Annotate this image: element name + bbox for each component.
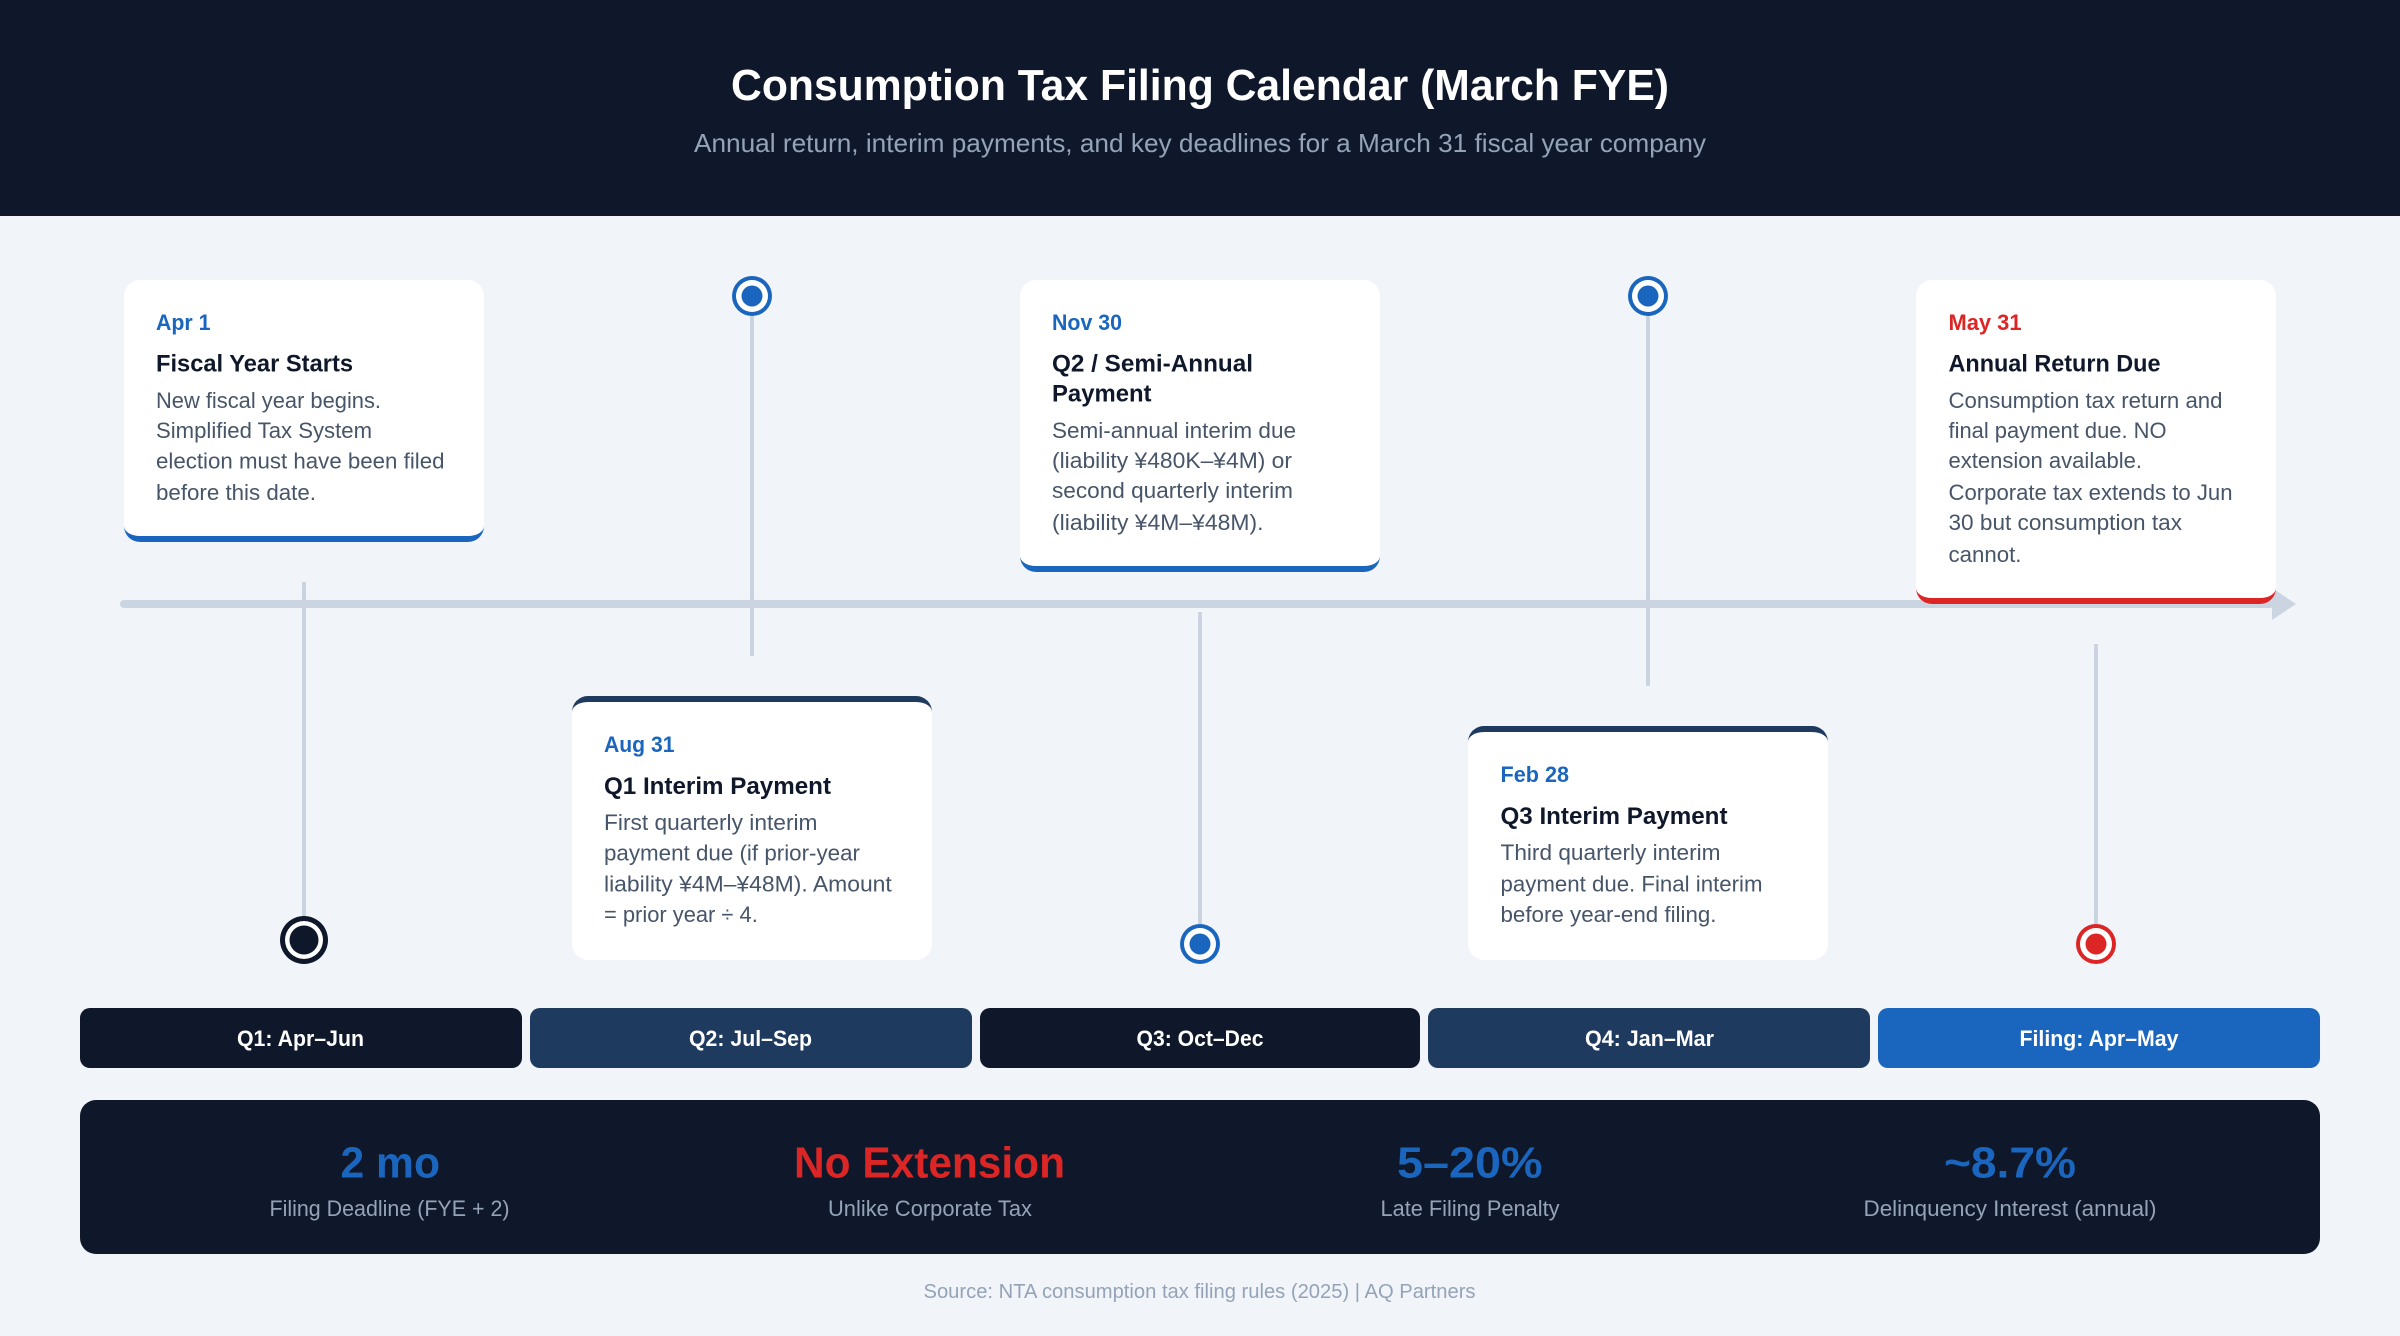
quarter bar: Q3 bbox=[980, 1008, 1420, 1068]
card body: Corporate tax extends to Jun bbox=[1948, 480, 2232, 505]
card body: Semi-annual interim due bbox=[1052, 418, 1296, 443]
quarter bar: Q4 bbox=[1428, 1008, 1870, 1068]
card heading: Annual Return Due bbox=[1948, 350, 2160, 378]
card body: (liability ¥4M–¥48M). bbox=[1052, 510, 1264, 535]
card heading: Fiscal Year Starts bbox=[156, 350, 353, 378]
quarter bar: Q1 bbox=[80, 1008, 522, 1068]
stat: filing deadline: Filing Deadline (FYE + 2) bbox=[270, 1196, 510, 1221]
panel: May 31 card bbox=[1916, 280, 2276, 604]
source note: Source: NTA consumption tax filing rules (2025) | AQ Partners bbox=[924, 1281, 1476, 1303]
quarter bar: Q3: Q3: Oct–Dec bbox=[1136, 1026, 1264, 1051]
stat: no extension: No Extension bbox=[794, 1138, 1065, 1188]
card body: = prior year ÷ 4. bbox=[604, 902, 758, 927]
connector: May 31 bbox=[2094, 644, 2098, 932]
card body: liability ¥4M–¥48M). Amount bbox=[604, 872, 892, 896]
panel: summary stats bbox=[80, 1100, 2320, 1254]
stat: no extension bbox=[794, 1138, 1065, 1221]
card body bbox=[1052, 418, 1296, 535]
card body: Consumption tax return and bbox=[1948, 388, 2222, 413]
connector: Nov 30 bbox=[1198, 612, 1202, 932]
card body: (liability ¥480K–¥4M) or bbox=[1052, 448, 1292, 473]
date: Nov 30 bbox=[1052, 310, 1122, 335]
stat: delinquency interest: Delinquency Interest (annual) bbox=[1864, 1196, 2156, 1221]
stat: no extension: Unlike Corporate Tax bbox=[828, 1196, 1032, 1221]
panel: Nov 30 card bbox=[1020, 280, 1380, 572]
card body: before year-end filing. bbox=[1500, 902, 1716, 927]
card body: cannot. bbox=[1948, 542, 2022, 567]
quarter bar: Q2 bbox=[530, 1008, 972, 1068]
quarter bar: Q2: Q2: Jul–Sep bbox=[689, 1026, 812, 1051]
date: Aug 31 bbox=[604, 732, 674, 757]
stat: late filing penalty bbox=[1380, 1138, 1560, 1221]
card body: Simplified Tax System bbox=[156, 418, 372, 443]
subtitle: Annual return, interim payments, and key deadlines for a March 31 fiscal year company bbox=[694, 128, 1706, 158]
marker: Aug 31 bbox=[732, 276, 772, 316]
card body bbox=[604, 810, 892, 927]
card heading: Payment bbox=[1052, 380, 1152, 408]
title: Consumption Tax Filing Calendar (March FYE) bbox=[731, 61, 1669, 110]
card body: payment due (if prior-year bbox=[604, 840, 860, 866]
header band bbox=[0, 0, 2400, 216]
panel: Aug 31 card bbox=[572, 696, 932, 960]
date: Feb 28 bbox=[1500, 762, 1569, 787]
marker: May 31 bbox=[2076, 924, 2116, 964]
connector: Apr 1 bbox=[302, 582, 306, 922]
stat: filing deadline: 2 mo bbox=[340, 1138, 440, 1188]
stat: delinquency interest bbox=[1864, 1138, 2156, 1221]
date: May 31 bbox=[1948, 310, 2022, 335]
card body: second quarterly interim bbox=[1052, 478, 1293, 503]
card body: 30 but consumption tax bbox=[1948, 510, 2182, 535]
card body: before this date. bbox=[156, 480, 316, 505]
quarter bar: Q4: Q4: Jan–Mar bbox=[1585, 1026, 1714, 1051]
panel: Feb 28 card bbox=[1468, 726, 1828, 960]
connector: Feb 28 bbox=[1646, 310, 1650, 686]
stat: late filing penalty: 5–20% bbox=[1397, 1138, 1542, 1188]
card body: final payment due. NO bbox=[1948, 418, 2166, 443]
stat: late filing penalty: Late Filing Penalty bbox=[1380, 1196, 1560, 1221]
quarter bar: Filing bbox=[1878, 1008, 2320, 1068]
card body: Third quarterly interim bbox=[1500, 840, 1720, 865]
marker: Feb 28 bbox=[1628, 276, 1668, 316]
card body: extension available. bbox=[1948, 448, 2142, 473]
card heading: Q1 Interim Payment bbox=[604, 773, 831, 800]
date: Apr 1 bbox=[156, 310, 210, 335]
stat: filing deadline bbox=[270, 1138, 510, 1221]
card body bbox=[1948, 388, 2232, 567]
card heading bbox=[1052, 350, 1253, 408]
quarter bar: Filing: Filing: Apr–May bbox=[2020, 1026, 2179, 1051]
timeline axis with arrow bbox=[120, 590, 2296, 620]
card body: First quarterly interim bbox=[604, 810, 818, 835]
panel: Apr 1 card bbox=[124, 280, 484, 542]
card body bbox=[156, 388, 444, 505]
card body bbox=[1500, 840, 1762, 927]
stat: delinquency interest: ~8.7% bbox=[1944, 1138, 2076, 1188]
card heading: Q2 / Semi-Annual bbox=[1052, 350, 1253, 378]
quarter bar: Q1: Q1: Apr–Jun bbox=[237, 1026, 364, 1051]
marker: Nov 30 bbox=[1180, 924, 1220, 964]
card heading: Q3 Interim Payment bbox=[1500, 803, 1728, 830]
card body: payment due. Final interim bbox=[1500, 872, 1762, 896]
card body: election must have been filed bbox=[156, 448, 444, 474]
connector: Aug 31 bbox=[750, 310, 754, 656]
marker: Apr 1 bbox=[280, 916, 328, 964]
card body: New fiscal year begins. bbox=[156, 388, 381, 413]
